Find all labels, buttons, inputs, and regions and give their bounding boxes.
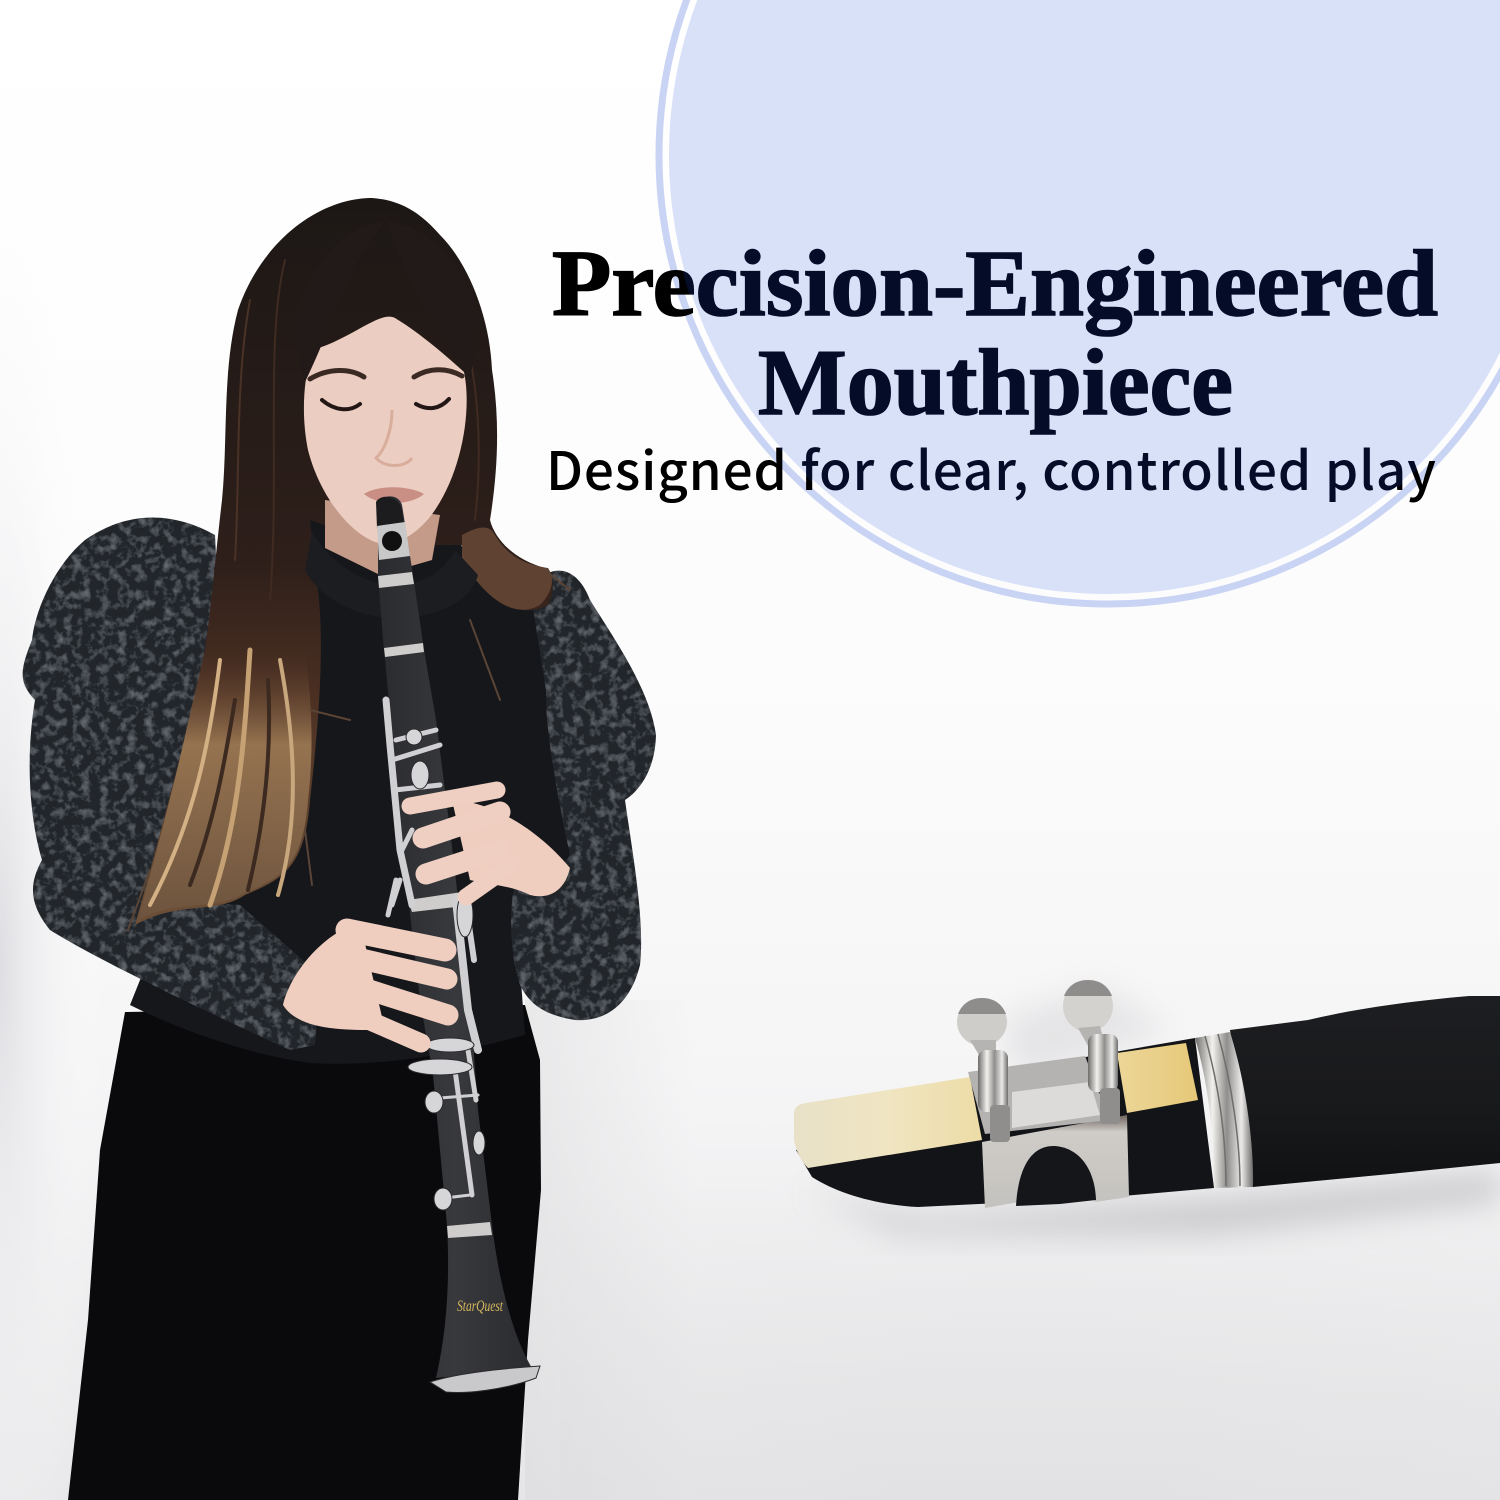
trousers <box>68 1005 541 1500</box>
silver rings <box>378 572 492 1238</box>
mouthpiece body <box>796 1038 1214 1207</box>
nose and lips <box>364 410 424 503</box>
drop shadow <box>805 1172 1500 1232</box>
subtitle: Designed for clear, controlled play <box>546 430 1436 506</box>
reed heel section <box>1117 1043 1198 1113</box>
bangs <box>292 222 480 382</box>
face <box>304 317 467 543</box>
reed tip section <box>794 1077 982 1168</box>
heading <box>546 232 1438 506</box>
barrel <box>1230 996 1500 1187</box>
clarinet body <box>378 496 532 1378</box>
hair back mass <box>135 198 553 925</box>
brand logo: StarQuest <box>457 1298 503 1315</box>
clarinet <box>376 496 540 1392</box>
eyebrows and eyes <box>310 370 462 409</box>
left screw <box>957 998 1010 1142</box>
title line 1: Precision-Engineered <box>552 232 1438 336</box>
hair strands <box>128 260 570 930</box>
metal ring <box>1195 1032 1253 1188</box>
ligature plate <box>968 1056 1110 1134</box>
key rods <box>386 700 478 1198</box>
neck <box>325 500 440 575</box>
keys <box>406 729 485 1210</box>
decorative circle with ring <box>659 0 1500 604</box>
left sleeve and shoulder <box>23 518 320 1050</box>
bell rim <box>430 1366 540 1392</box>
mouthpiece tip <box>376 497 404 528</box>
right screw <box>1063 980 1120 1124</box>
right sleeve <box>511 571 656 1020</box>
person playing clarinet <box>23 198 656 1500</box>
mouthpiece close-up <box>794 980 1500 1232</box>
lower hand <box>283 922 448 1043</box>
right hair brown lengths <box>462 528 552 610</box>
ligature arch cutout <box>1016 1146 1096 1206</box>
ribbed top <box>130 510 590 1064</box>
upper hand <box>410 790 570 897</box>
ligature <box>377 522 410 560</box>
ligature band <box>982 1115 1129 1208</box>
title line 2: Mouthpiece <box>758 331 1233 435</box>
turtleneck collar <box>305 532 478 618</box>
blond hair lengths <box>138 650 312 920</box>
